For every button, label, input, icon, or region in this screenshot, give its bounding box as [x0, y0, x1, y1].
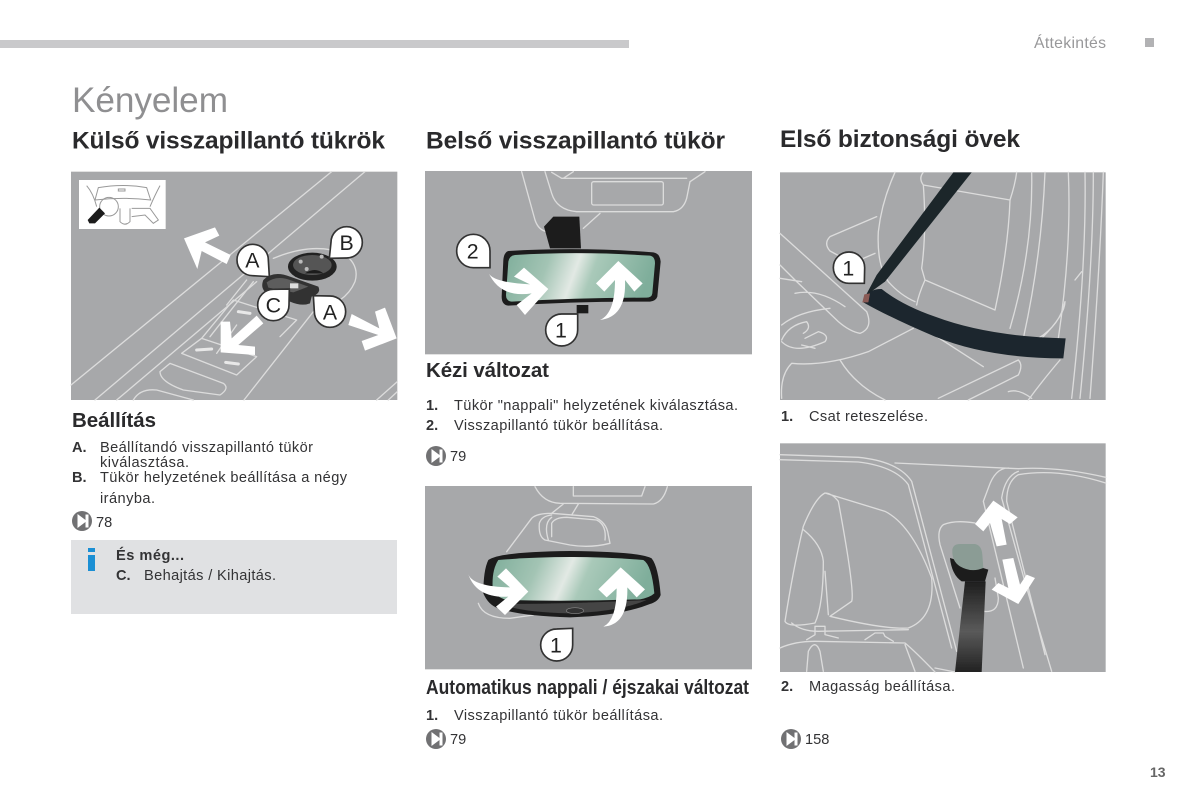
arrow: up [975, 501, 1018, 546]
arrow: horizontal adjust [468, 568, 528, 615]
mirror body [502, 249, 661, 306]
subheading: automatic version: Automatikus nappali / éjszakai változat [426, 676, 749, 699]
callout A: A [245, 249, 260, 273]
info box [71, 540, 397, 614]
instruction list: manual version: Tükör "nappali" helyzetének kiválasztása. [454, 398, 738, 414]
instruction: height: 2. [781, 679, 793, 695]
callout A [237, 244, 269, 277]
arrow: down [992, 558, 1035, 604]
mirror glass [493, 557, 654, 601]
instruction list: adjustment: Tükör helyzetének beállítása a négy [100, 470, 348, 486]
lap belt [863, 289, 1066, 358]
top decorative bar [0, 40, 629, 48]
arrow: vertical adjust [596, 261, 643, 320]
panel: door mirror controls [71, 172, 397, 400]
panel: automatic rear-view mirror [425, 486, 752, 669]
info box: Behajtás / Kihajtás. [144, 568, 276, 584]
instruction: height: Magasság beállítása. [809, 679, 955, 695]
callout C: C [266, 294, 281, 318]
belt guide [950, 558, 988, 581]
instruction list: manual version: Visszapillantó tükör beállítása. [454, 418, 663, 434]
instruction: buckle: Csat reteszelése. [809, 409, 928, 425]
page reference 79 second [426, 729, 466, 749]
info box: És még... [116, 547, 184, 564]
mirror adjustment knob [288, 253, 337, 281]
shoulder belt [866, 172, 972, 296]
page reference 79 second: 79 [450, 732, 466, 748]
panel: manual rear-view mirror [425, 171, 752, 354]
page reference 158 [781, 729, 829, 749]
arrow: vertical adjust [598, 567, 645, 627]
heading: seat belts: Első biztonsági övek [780, 126, 1020, 153]
page reference 79 [426, 446, 466, 466]
page reference 158: 158 [805, 732, 829, 748]
callout 1 [546, 314, 578, 346]
instruction: automatic version: Visszapillantó tükör beállítása. [454, 708, 663, 724]
callout A second [313, 296, 346, 327]
mirror selector switch [262, 274, 319, 305]
instruction list: adjustment: kiválasztása. [100, 455, 189, 471]
heading: inner mirror: Belső visszapillantó tükör [426, 128, 725, 154]
callout 1: 1 [550, 633, 562, 657]
section label: Áttekintés [1034, 33, 1106, 52]
section marker [1145, 38, 1154, 47]
subheading: adjustment: Beállítás [72, 409, 156, 432]
instruction: automatic version: 1. [426, 708, 438, 724]
panel: belt height [780, 443, 1106, 672]
arrow: horizontal adjust [488, 268, 548, 315]
callout 2: 2 [467, 240, 479, 264]
instruction list: adjustment: Beállítandó visszapillantó tükör [100, 440, 313, 456]
callout A second: A [323, 300, 338, 324]
page number: 13 [1150, 764, 1166, 780]
page title: Kényelem [72, 81, 228, 120]
arrow: down-right [348, 308, 397, 351]
callout 1: 1 [555, 318, 567, 342]
callout B: B [340, 231, 354, 255]
inset: dashboard locator [79, 180, 166, 229]
callout 1: 1 [842, 256, 854, 280]
callout B [329, 227, 362, 258]
callout 2 [457, 234, 490, 268]
arrow: down-left [221, 316, 263, 355]
buckle [862, 293, 870, 302]
mirror glass [506, 253, 655, 302]
callout 1 [541, 628, 573, 661]
mirror body [483, 551, 661, 617]
instruction: buckle: 1. [781, 409, 793, 425]
instruction list: adjustment: B. [72, 470, 87, 486]
page reference 78 [72, 511, 112, 531]
page reference 78: 78 [96, 515, 112, 531]
instruction list: manual version: 1. [426, 398, 438, 414]
info box: C. [116, 568, 131, 584]
arrow: up-left [184, 227, 231, 269]
callout 1 [833, 252, 865, 283]
height adjuster [952, 544, 983, 570]
icon: info [88, 548, 95, 571]
subheading: manual version: Kézi változat [426, 359, 549, 382]
belt strap [955, 581, 986, 672]
instruction list: manual version: 2. [426, 418, 438, 434]
instruction list: adjustment [72, 440, 348, 507]
instruction list: adjustment: irányba. [100, 491, 155, 507]
callout C [258, 289, 289, 321]
panel: seat belt buckle [780, 172, 1106, 400]
mirror mount [544, 217, 581, 248]
instruction list: manual version [426, 398, 738, 434]
heading: outer mirrors: Külső visszapillantó tükrök [72, 128, 385, 154]
instruction list: adjustment: A. [72, 440, 87, 456]
page reference 79: 79 [450, 449, 466, 465]
